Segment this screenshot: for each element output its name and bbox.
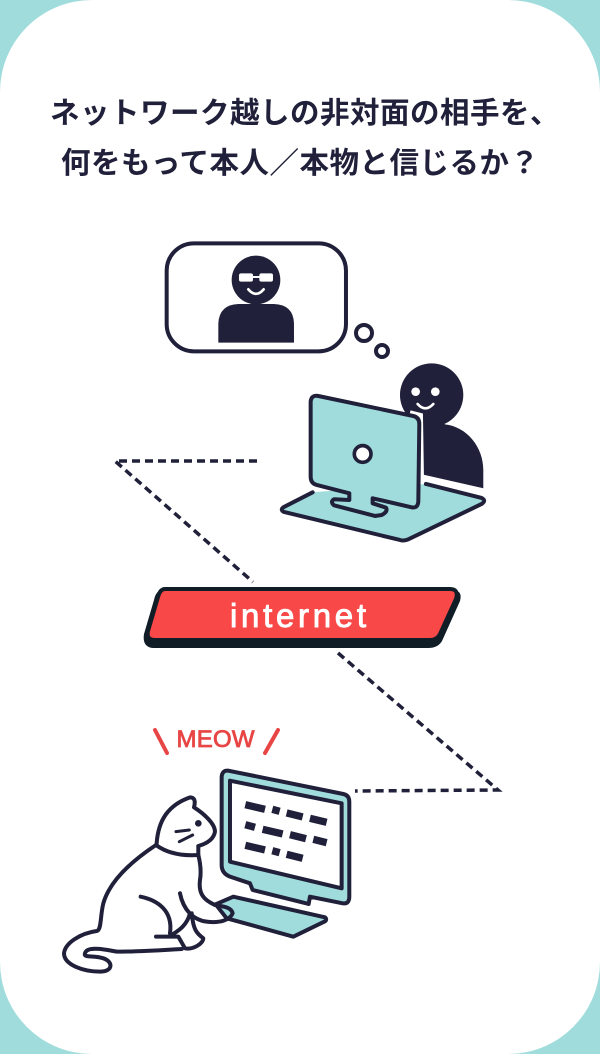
thought bubble with masked person [167, 243, 346, 351]
cat collar [156, 845, 198, 855]
cat body [64, 845, 182, 972]
dashed connection line: top [115, 461, 257, 582]
text: 何をもって本人／本物と信じるか？ [61, 147, 540, 180]
cat head [157, 797, 215, 846]
monitor [222, 771, 349, 904]
cat hind leg [141, 897, 203, 949]
title [50, 97, 560, 180]
cat arm [180, 855, 233, 922]
MEOW exclamation [155, 726, 278, 753]
banner label: internet [230, 597, 366, 634]
person body [410, 397, 483, 488]
monitor screen [230, 781, 342, 888]
laptop base [282, 484, 484, 541]
dashed connection line: bottom [338, 653, 498, 791]
keyboard [216, 897, 326, 937]
thought bubble dots [356, 325, 388, 357]
MEOW exclamation: MEOW [176, 726, 255, 753]
monitor white halo [410, 413, 422, 478]
laptop screen [311, 396, 419, 516]
person at laptop [282, 363, 484, 541]
screen code lines [245, 805, 327, 858]
cat eye [195, 820, 202, 827]
text: ネットワーク越しの非対面の相手を、 [50, 97, 560, 130]
cat whiskers [176, 830, 193, 842]
internet banner [144, 589, 461, 648]
cat at desktop computer [64, 771, 349, 972]
